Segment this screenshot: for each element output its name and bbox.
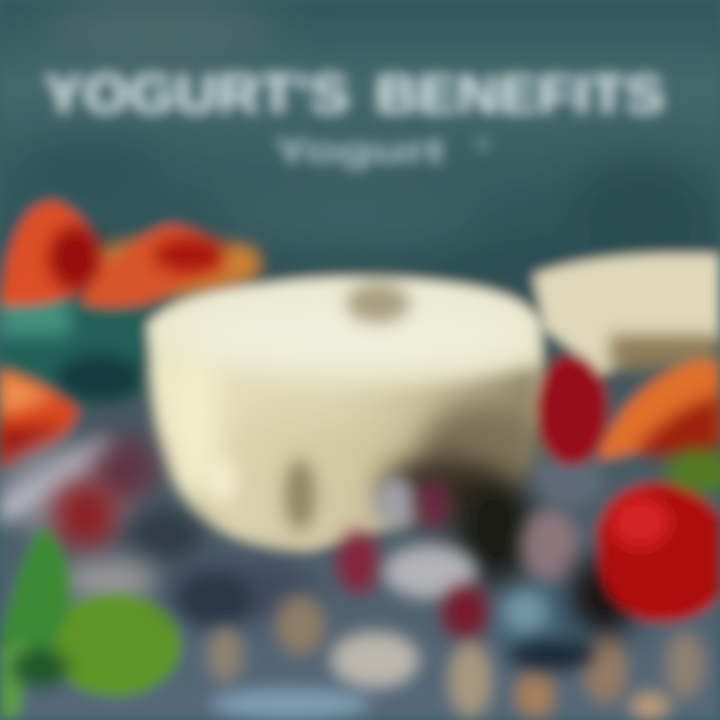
title [44,64,664,124]
teal dish of strawberries [0,202,260,405]
subtitle: + [474,128,492,161]
berries and seeds on table [160,454,705,720]
yogurt bowl [148,278,541,550]
right strawberries and leaf [536,354,720,635]
blueberry [495,585,596,671]
title: YOGURT'S [44,64,349,124]
right yogurt block behind [534,254,720,375]
title: BENEFITS [376,66,664,124]
subtitle [274,128,492,170]
subtitle: Yogurt [274,132,444,170]
left table with reflections and berries [0,435,205,600]
teal dish [0,300,150,405]
strawberry slices in dish [80,238,260,298]
left strawberry slice [0,370,78,468]
mint leaves [0,525,181,720]
